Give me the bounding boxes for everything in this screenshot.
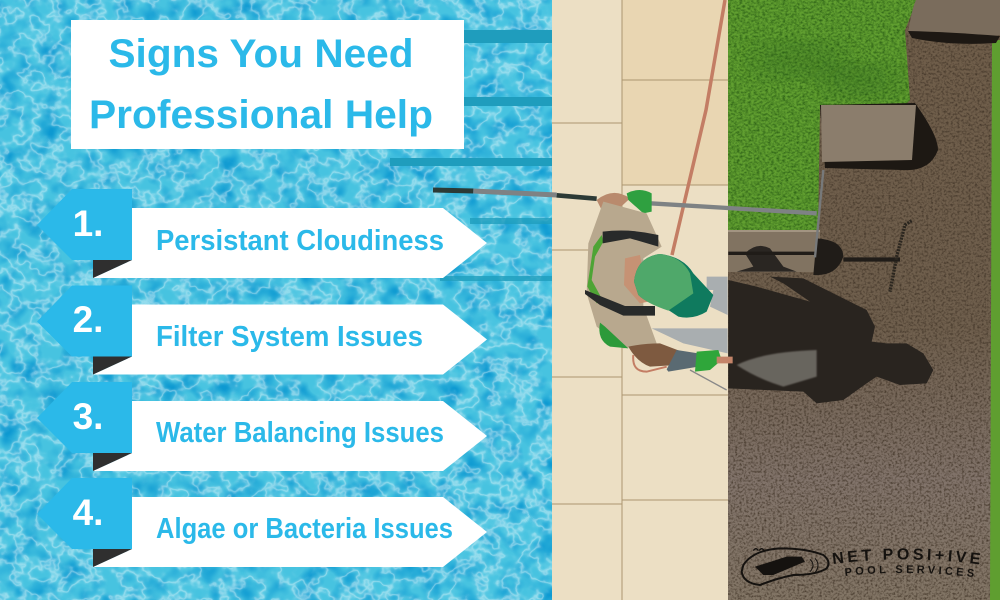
- item 4: Algae or Bacteria Issues: 4.: [73, 492, 103, 533]
- item 2: Filter System Issues: 2.: [73, 299, 103, 340]
- arm back: [597, 193, 630, 220]
- sod rolls: [728, 0, 1000, 272]
- shadow on paving: [652, 277, 728, 353]
- glove front: [667, 350, 698, 372]
- floor hose: [633, 355, 667, 372]
- item 3: Water Balancing Issues: Water Balancing Issues: [156, 417, 444, 449]
- shirt body: [587, 202, 662, 348]
- background: pool water: [0, 0, 552, 600]
- item 3: Water Balancing Issues: [37, 382, 487, 471]
- item 1: Persistant Cloudiness: 1.: [73, 203, 103, 244]
- background: soil: [728, 0, 1000, 600]
- logo wordmark: NET POSI+IVE: [832, 548, 980, 564]
- logo icon: [742, 548, 829, 585]
- hose: [672, 0, 725, 255]
- forearm: [628, 343, 682, 367]
- item 4: Algae or Bacteria Issues: Algae or Bacteria Issues: [156, 513, 453, 545]
- title line 2: Professional Help: [89, 93, 433, 137]
- cap: [634, 254, 713, 318]
- logo tagline: POOL SERVICES: [845, 565, 974, 577]
- nozzle: [717, 357, 733, 363]
- item 1: Persistant Cloudiness: [37, 189, 487, 278]
- shadow head on slab: [737, 246, 797, 272]
- shadow on soil: [728, 277, 933, 403]
- background: pool deck pavers: [552, 0, 729, 600]
- pole: [433, 190, 817, 213]
- item 3: Water Balancing Issues: 3.: [73, 396, 103, 437]
- glove back: [627, 190, 652, 213]
- item 2: Filter System Issues: Filter System Issues: [156, 321, 423, 353]
- title card: [71, 20, 464, 149]
- logo: Net Positive Pool Services: [740, 547, 980, 586]
- green bag: [599, 323, 628, 348]
- neck: [624, 255, 648, 303]
- spray: [737, 350, 817, 387]
- harness straps: [585, 231, 658, 316]
- worker and shadow: [433, 170, 933, 403]
- rake head: [890, 221, 912, 292]
- fixed rake: [815, 170, 823, 257]
- safety green strap: [587, 235, 603, 303]
- item 2: Filter System Issues: [37, 286, 487, 374]
- background: grass: [728, 0, 1000, 600]
- item 1: Persistant Cloudiness: Persistant Cloudiness: [156, 225, 444, 257]
- item 4: Algae or Bacteria Issues: [37, 478, 487, 567]
- title line 1: Signs You Need: [108, 32, 414, 76]
